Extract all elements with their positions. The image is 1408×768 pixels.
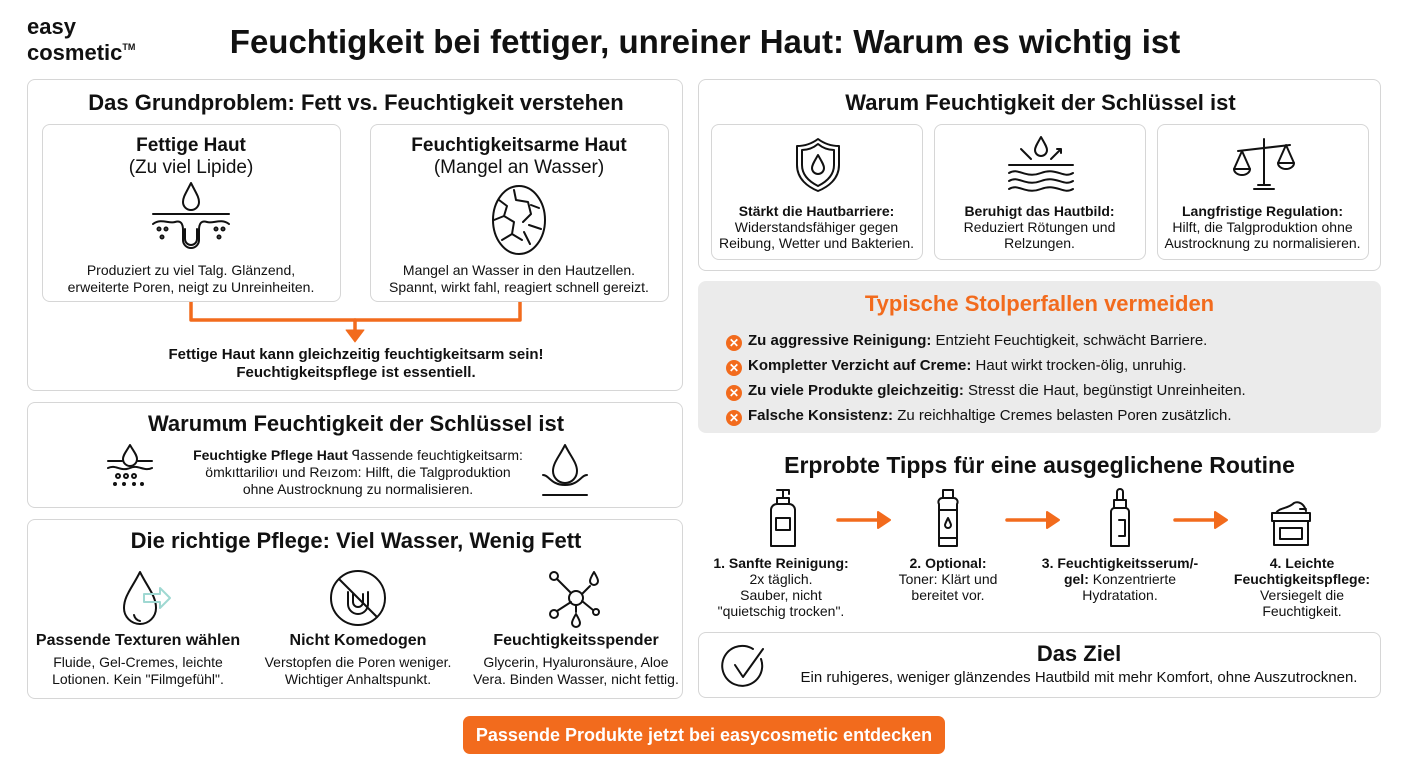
card: Regulation: Hilft, die Talgproduktion ohne (1172, 219, 1353, 235)
heading: Das Grundproblem: Fett vs. Feuchtigkeit verstehen (88, 90, 624, 115)
icon: toner (937, 489, 959, 547)
item: Komedogen: Nicht Komedogen (290, 632, 426, 649)
step texts: Sauber, nicht (740, 587, 822, 603)
icon: serum (1110, 488, 1130, 547)
list: Falsche Konsistenz: Zu reichhaltige Cremes belasten Poren zusätzlich. (748, 407, 1232, 424)
title: Feuchtigkeit bei fettiger, unreiner Haut: Warum es wichtig ist (230, 23, 1180, 60)
item: Texturen: Passende Texturen wählen (36, 632, 240, 649)
card: Hautbarriere (711, 124, 923, 260)
list: Zu viele Produkte gleichzeitig: Stresst die Haut, begünstigt Unreinheiten. (748, 382, 1246, 399)
heading: Das Ziel (1037, 641, 1121, 666)
heading: Typische Stolperfallen vermeiden (865, 291, 1214, 316)
card: fettige Haut: erweiterte Poren, neigt zu Unreinheiten. (68, 279, 314, 295)
item: Feuchtigkeitsspender: Vera. Binden Wasser, nicht fettig. (473, 671, 679, 687)
panel: Stolperfallen (698, 281, 1381, 433)
step 4: 4. Leichte (1270, 555, 1334, 571)
step texts: "quietschig trocken". (718, 603, 844, 619)
heading: Warumɩm Feuchtigkeit der Schlüssel ist (148, 411, 564, 436)
step texts: 1. Sanfte Reinigung: (713, 555, 849, 571)
card: fettige Haut (42, 124, 341, 302)
heading: Tipps: Erprobte Tipps für eine ausgeglichene Routine (784, 452, 1295, 478)
text: Feuchtigke Pflege Haut ꟼassende feuchtigkeitsarm: (193, 447, 523, 463)
text: ömkıttariliơı und Reızom: Hilft, die Talgproduktion (205, 464, 511, 480)
step 3: Hydratation. (1082, 587, 1158, 603)
step 2 (898, 555, 997, 603)
list: ✕ (729, 336, 739, 350)
step texts (713, 555, 849, 619)
card: Regulation (1157, 124, 1369, 260)
item: Komedogen: Verstopfen die Poren weniger. (265, 654, 451, 670)
card: Hautbild: Reduziert Rötungen und (964, 219, 1115, 235)
card: Hautbarriere: Widerstandsfähiger gegen (735, 219, 898, 235)
panel: Warum (left) (27, 402, 683, 508)
item: Texturen: Lotionen. Kein "Filmgefühl". (52, 671, 224, 687)
callout: Feuchtigkeitspflege ist essentiell. (236, 364, 476, 381)
list: Zu aggressive Reinigung: Entzieht Feuchtigkeit, schwächt Barriere. (748, 332, 1207, 349)
item: Feuchtigkeitsspender (473, 571, 679, 687)
arrow (836, 511, 891, 529)
step 3: 3. Feuchtigkeitsserum/- (1042, 555, 1198, 571)
card: fettige Haut: (Zu viel Lipide) (129, 157, 253, 178)
logo: easy (27, 14, 76, 39)
panel: Grundproblem (27, 79, 683, 391)
text: ohne Austrocknung zu normalisieren. (243, 481, 473, 497)
list: ✕ (729, 411, 739, 425)
item: Feuchtigkeitsspender: Feuchtigkeitsspender (493, 632, 659, 649)
step 4 (1234, 555, 1370, 619)
card: feuchtigkeitsarme Haut: Feuchtigkeitsarme Haut (411, 135, 627, 156)
panel: Warum (right) (698, 79, 1381, 271)
arrow (1005, 511, 1060, 529)
card: Hautbild: Relzungen. (1004, 235, 1075, 251)
logo (27, 14, 135, 65)
icon: skin drop (107, 444, 153, 486)
callout: Fettige Haut kann gleichzeitig feuchtigkeitsarm sein! (168, 346, 544, 363)
card: Hautbarriere: Stärkt die Hautbarriere: (739, 203, 894, 219)
item: Texturen (36, 571, 240, 687)
step texts: 2x täglich. (749, 571, 813, 587)
list: ✕ (729, 386, 739, 400)
step 2: bereitet vor. (911, 587, 985, 603)
arrow: bracket (189, 302, 522, 342)
heading: Die richtige Pflege: Viel Wasser, Wenig Fett (131, 528, 581, 553)
step 2: 2. Optional: (910, 555, 986, 571)
step 3 (1042, 555, 1198, 603)
item: Feuchtigkeitsspender: Glycerin, Hyaluronsäure, Aloe (483, 654, 669, 670)
button: CTA (463, 716, 945, 754)
card: Regulation: Langfristige Regulation: (1182, 203, 1343, 219)
item: Texturen: Fluide, Gel-Cremes, leichte (53, 654, 223, 670)
list: Kompletter Verzicht auf Creme: Haut wirkt trocken-ölig, unruhig. (748, 357, 1186, 374)
text: Ein ruhigeres, weniger glänzendes Hautbild mit mehr Komfort, ohne Auszutrocknen. (801, 669, 1357, 686)
icon: pump bottle (770, 489, 796, 547)
text (193, 447, 523, 497)
card: feuchtigkeitsarme Haut: Spannt, wirkt fahl, reagiert schnell gereizt. (389, 279, 649, 295)
card: Hautbarriere: Reibung, Wetter und Bakterien. (719, 235, 914, 251)
item: Komedogen (264, 570, 451, 687)
step 4: Feuchtigkeitspflege: (1234, 571, 1370, 587)
step 3: gel: Konzentrierte (1064, 571, 1176, 587)
card: fettige Haut: Produziert zu viel Talg. Glänzend, (87, 262, 295, 278)
card: feuchtigkeitsarme Haut: Mangel an Wasser in den Hautzellen. (403, 262, 635, 278)
card: fettige Haut: Fettige Haut (136, 135, 246, 156)
button: CTA: Passende Produkte jetzt bei easycosmetic entdecken (476, 725, 932, 745)
card: feuchtigkeitsarme Haut (370, 124, 669, 302)
step 4: Versiegelt die (1260, 587, 1344, 603)
step 4: Feuchtigkeit. (1262, 603, 1342, 619)
card: feuchtigkeitsarme Haut: (Mangel an Wasser) (434, 157, 604, 178)
card: Hautbild (934, 124, 1146, 260)
card: Hautbild: Beruhigt das Hautbild: (964, 203, 1115, 219)
list: ✕ (729, 361, 739, 375)
icon: drop on skin (542, 444, 588, 496)
icon: cream jar (1271, 501, 1311, 546)
panel: Das Ziel (698, 632, 1381, 698)
arrow (1173, 511, 1228, 529)
list (726, 332, 1246, 426)
logo: cosmeticTM (27, 40, 135, 65)
item: Komedogen: Wichtiger Anhaltspunkt. (285, 671, 431, 687)
callout (168, 346, 544, 381)
icon: check (721, 644, 764, 687)
card: Regulation: Austrocknung zu normalisieren. (1164, 235, 1361, 251)
step 2: Toner: Klärt und (899, 571, 997, 587)
panel: richtige Pflege (27, 519, 683, 699)
heading: Warum Feuchtigkeit der Schlüssel ist (845, 90, 1236, 115)
